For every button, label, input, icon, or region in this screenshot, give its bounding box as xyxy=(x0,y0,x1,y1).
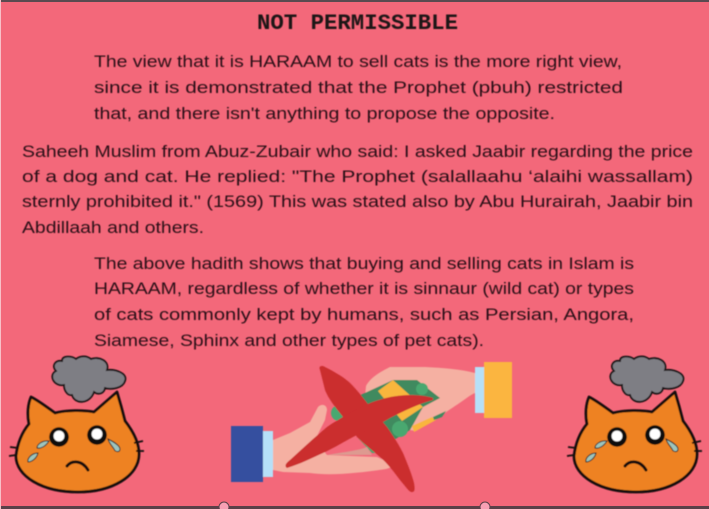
eyes xyxy=(49,427,69,447)
text block: hadith from Saheeh Muslim xyxy=(22,143,693,237)
red cross xyxy=(319,366,415,492)
text block: view on selling cats: since it is demonstrated that the Prophet (pbuh) restricted xyxy=(94,79,623,97)
text block: hadith from Saheeh Muslim: Abdillaah and others. xyxy=(22,219,204,237)
blue cuff xyxy=(231,426,263,482)
text block: view on selling cats: The view that it is HARAAM to sell cats is the more right view, xyxy=(94,53,622,71)
text block: ruling explanation: of cats commonly kept by humans, such as Persian, Angora, xyxy=(94,306,634,324)
text block: ruling explanation: HARAAM, regardless of whether it is sinnaur (wild cat) or types xyxy=(94,280,634,298)
icon: sad cat with cloud, right xyxy=(567,356,702,492)
text block: hadith from Saheeh Muslim: Saheeh Muslim from Abuz-Zubair who said: I asked Jaabir regarding the price xyxy=(22,143,693,161)
frown xyxy=(67,462,88,470)
text block: ruling explanation xyxy=(94,255,634,350)
icon: grey cloud xyxy=(52,356,125,402)
banknotes xyxy=(332,380,440,453)
lower hand xyxy=(273,405,391,474)
illustration: crossed-out hand money exchange xyxy=(231,362,512,492)
text block: ruling explanation: Siamese, Sphinx and other types of pet cats). xyxy=(94,332,484,350)
text block: hadith from Saheeh Muslim: sternly prohibited it." (1569) This was stated also by Abu Hurairah, Jaabir bin xyxy=(22,193,693,211)
icon: cat face xyxy=(16,392,139,492)
text block: ruling explanation: The above hadith shows that buying and selling cats in Islam is xyxy=(94,255,634,273)
title: NOT PERMISSIBLE xyxy=(257,11,458,36)
decorative bottom pins xyxy=(219,502,229,509)
tears xyxy=(28,439,120,462)
text block: hadith from Saheeh Muslim: of a dog and cat. He replied: "The Prophet (salallaahu ‘alaihi wassallam) xyxy=(22,168,693,186)
text block: view on selling cats xyxy=(94,53,623,123)
upper hand xyxy=(365,367,475,431)
icon: sad cat with cloud, left xyxy=(9,356,144,492)
yellow cuff xyxy=(484,362,512,418)
whiskers xyxy=(9,441,144,456)
text block: view on selling cats: that, and there isn't anything to propose the opposite. xyxy=(94,105,555,123)
